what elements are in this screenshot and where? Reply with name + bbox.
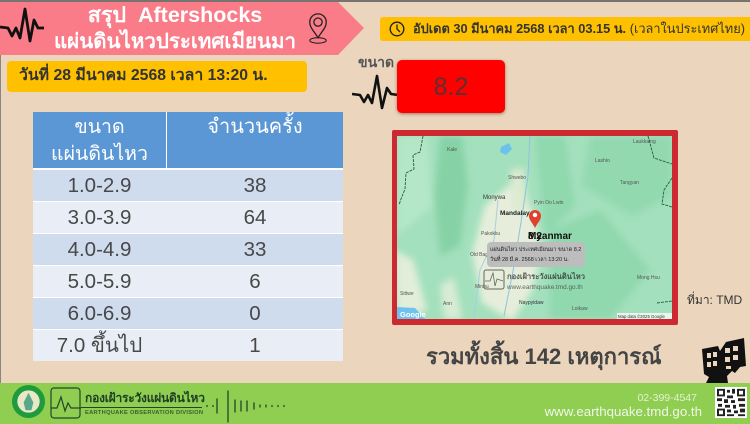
row 4.0-4.9: 4.0-4.9 bbox=[68, 238, 131, 261]
table header bbox=[33, 112, 343, 168]
row 5.0-5.9: 5.0-5.9 bbox=[68, 270, 131, 293]
row 7.0 and above: 1 bbox=[249, 334, 261, 357]
magnitude box bbox=[397, 60, 505, 113]
map watermark: www.earthquake.tmd.go.th bbox=[506, 284, 583, 291]
map bbox=[392, 130, 678, 325]
footer bbox=[0, 383, 750, 424]
phone number: 02-399-4547 bbox=[637, 392, 697, 404]
icon: collapsed building bbox=[702, 338, 746, 383]
icon: seismograph logo bbox=[50, 387, 81, 419]
map place labels: Kale bbox=[447, 147, 457, 153]
title text: แผ่นดินไหวประเทศเมียนมา bbox=[54, 30, 296, 53]
row 7.0 and above bbox=[33, 330, 343, 361]
map pin bbox=[529, 210, 541, 228]
title ribbon bbox=[0, 2, 364, 55]
row 3.0-3.9: 3.0-3.9 bbox=[68, 206, 131, 229]
map place labels: Pyin Oo Lwin bbox=[534, 200, 564, 206]
icon: clock bbox=[390, 22, 404, 36]
map place labels: Naypyidaw bbox=[519, 300, 544, 306]
map info label: วันที่ 28 มี.ค. 2568 เวลา 13:20 น. bbox=[490, 255, 569, 263]
map place labels: Minbu bbox=[475, 284, 489, 290]
row 3.0-3.9 bbox=[33, 202, 343, 233]
decorative sound wave bbox=[206, 390, 285, 423]
row 6.0-6.9 bbox=[33, 298, 343, 329]
map watermark bbox=[484, 270, 585, 291]
total events: รวมทั้งสิ้น 142 เหตุการณ์ bbox=[426, 344, 662, 369]
row 1.0-2.9: 1.0-2.9 bbox=[68, 174, 131, 197]
magnitude box: 8.2 bbox=[434, 73, 468, 101]
division english: EARTHQUAKE OBSERVATION DIVISION bbox=[85, 410, 203, 416]
row 5.0-5.9: 6 bbox=[249, 270, 261, 293]
map place labels: Mandalay bbox=[500, 210, 530, 217]
table bbox=[33, 112, 343, 361]
update bar bbox=[380, 17, 750, 41]
map info label: แผ่นดินไหว ประเทศเมียนมา ขนาด 8.2 bbox=[490, 246, 581, 253]
map info label bbox=[487, 242, 585, 267]
map place labels: Shwebo bbox=[508, 175, 526, 181]
map place labels: Loikaw bbox=[572, 306, 588, 312]
map place labels: Sittwe bbox=[400, 291, 414, 297]
map place labels: Ann bbox=[443, 301, 452, 307]
row 1.0-2.9 bbox=[33, 170, 343, 201]
map label Myanmar and magnitude: 8.2 bbox=[528, 231, 542, 242]
title text: สรุป Aftershocks bbox=[88, 3, 262, 27]
map attribution: Map data ©2025 Google bbox=[618, 314, 665, 319]
row 5.0-5.9 bbox=[33, 266, 343, 297]
row 4.0-4.9 bbox=[33, 234, 343, 265]
row 7.0 and above: 7.0 ขึ้นไป bbox=[57, 334, 142, 357]
map label Myanmar and magnitude: Myanmar bbox=[528, 231, 572, 242]
row 1.0-2.9: 38 bbox=[244, 174, 266, 197]
row 3.0-3.9: 64 bbox=[244, 206, 266, 229]
row 4.0-4.9: 33 bbox=[244, 238, 266, 261]
source credit: ที่มา: TMD bbox=[687, 293, 742, 307]
map place labels: Pakokku bbox=[481, 231, 500, 237]
map place labels: Laukkaing bbox=[633, 139, 656, 145]
map watermark: กองเฝ้าระวังแผ่นดินไหว bbox=[507, 271, 585, 281]
icon: magnitude wave bbox=[352, 74, 397, 110]
page frame bbox=[0, 0, 750, 2]
map place labels bbox=[400, 139, 660, 312]
icon: location pin bbox=[309, 13, 327, 44]
map place labels: Old Bagan bbox=[470, 252, 494, 258]
icon: QR code bbox=[715, 387, 747, 418]
map place labels: Lashio bbox=[595, 158, 610, 164]
google logo: Google bbox=[400, 310, 426, 319]
icon: department seal bbox=[12, 385, 45, 418]
table header: แผ่นดินไหว bbox=[51, 143, 148, 165]
title text bbox=[54, 3, 296, 53]
map place labels: Monywa bbox=[483, 195, 506, 201]
magnitude label: ขนาด bbox=[358, 54, 394, 70]
website: www.earthquake.tmd.go.th bbox=[545, 404, 702, 419]
division name: กองเฝ้าระวังแผ่นดินไหว bbox=[85, 391, 205, 405]
date bar: วันที่ 28 มีนาคม 2568 เวลา 13:20 น. bbox=[19, 67, 268, 84]
table header: จำนวนครั้ง bbox=[207, 116, 303, 138]
update text: อัปเดต 30 มีนาคม 2568 เวลา 03.15 น. (เวลาในประเทศไทย) bbox=[413, 21, 745, 36]
row 6.0-6.9: 6.0-6.9 bbox=[68, 302, 131, 325]
icon: seismograph wave bbox=[0, 8, 44, 42]
table header: ขนาด bbox=[74, 116, 125, 138]
map place labels: Tangyan bbox=[620, 180, 639, 186]
row 6.0-6.9: 0 bbox=[249, 302, 261, 325]
map terrain bbox=[395, 136, 672, 321]
map place labels: Mong Hsu bbox=[637, 275, 660, 281]
date bar bbox=[7, 61, 307, 92]
